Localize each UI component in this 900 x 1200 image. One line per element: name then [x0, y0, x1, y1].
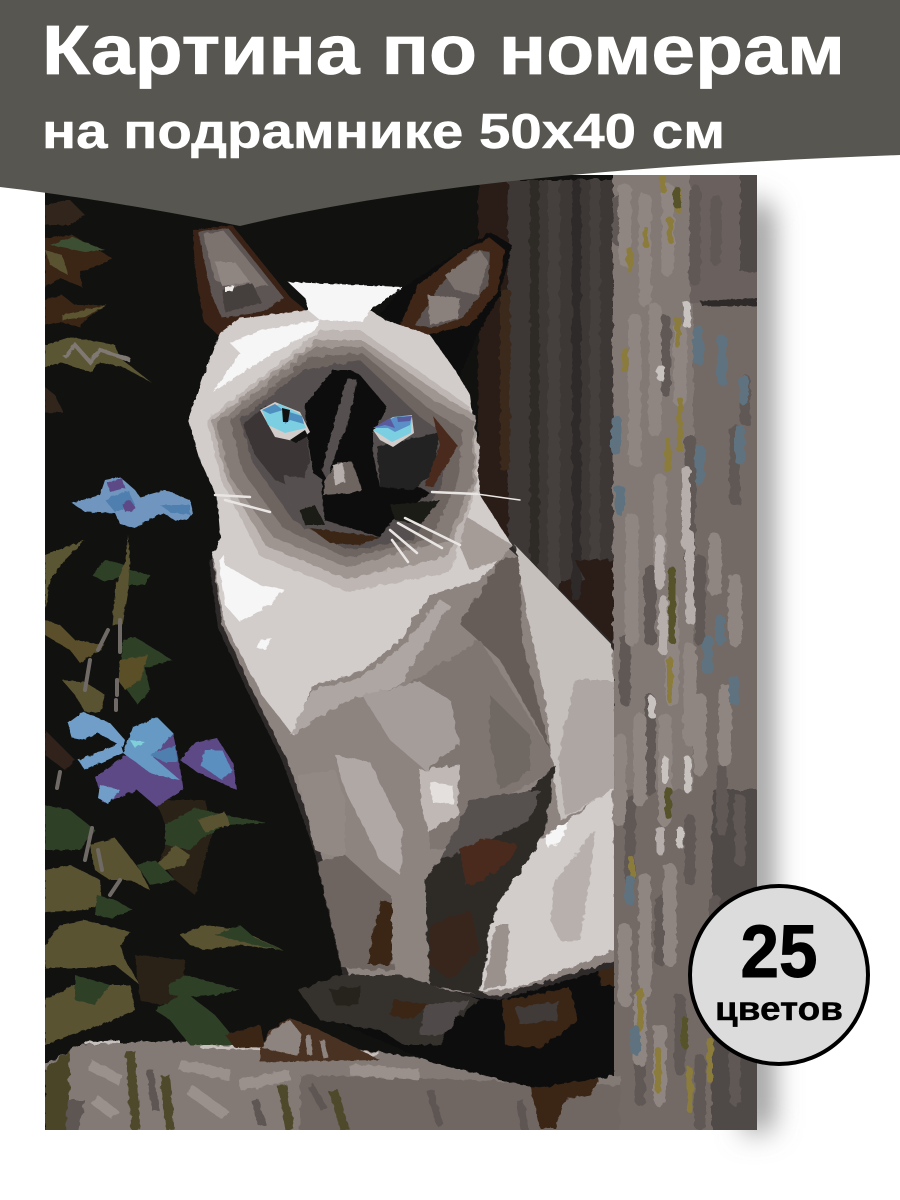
dark haunch: [425, 765, 555, 995]
canvas drop shadow: [745, 195, 772, 1134]
left foreleg light: [335, 755, 403, 875]
face details: [243, 370, 458, 545]
highlights: [219, 555, 284, 622]
forehead white patch: [213, 320, 320, 392]
head light fur: [188, 310, 512, 600]
small paw: [260, 1018, 380, 1062]
post base: [613, 170, 763, 1135]
cheek shade: [460, 517, 512, 570]
cat: [188, 225, 620, 1088]
belly shade: [400, 640, 555, 850]
left eye: [260, 402, 310, 443]
stone ledge: [45, 1040, 620, 1135]
lower leg: [317, 855, 402, 970]
whiskers: [215, 492, 520, 562]
right haunch light: [480, 788, 616, 992]
white tuft: [288, 282, 403, 322]
flowers: lower blue: [68, 712, 237, 807]
wooden boards behind cat: [478, 180, 616, 650]
subtitle: на подрамнике 50х40 см: [42, 105, 725, 159]
foliage stems: [57, 620, 120, 895]
left ear: [193, 225, 308, 335]
right ear: [400, 232, 512, 334]
post crack: [700, 298, 757, 306]
post streaks: [616, 178, 745, 1125]
painting canvas: [45, 170, 763, 1135]
badge label: цветов: [715, 990, 843, 1027]
big paws: [298, 975, 480, 1045]
right eye: [373, 415, 414, 447]
flank dark wedge: [460, 555, 550, 750]
flank light: [515, 545, 615, 820]
foliage lower left: [45, 620, 283, 1048]
foliage upper left: [45, 200, 152, 625]
body base: [209, 520, 620, 1000]
flower: top blue: [72, 477, 193, 528]
title: Картина по номерам: [42, 11, 845, 89]
number of colours: 25: [740, 910, 818, 993]
dark background: [45, 175, 614, 1130]
chest light fur: [212, 538, 430, 736]
ribs: [362, 682, 460, 770]
wooden post: [613, 170, 763, 1135]
body fur: [213, 520, 618, 995]
face rings: [207, 330, 480, 592]
head: [188, 282, 512, 600]
header banner: [0, 0, 900, 226]
tail: [421, 966, 614, 1088]
badge: 25 colours: [690, 886, 868, 1064]
